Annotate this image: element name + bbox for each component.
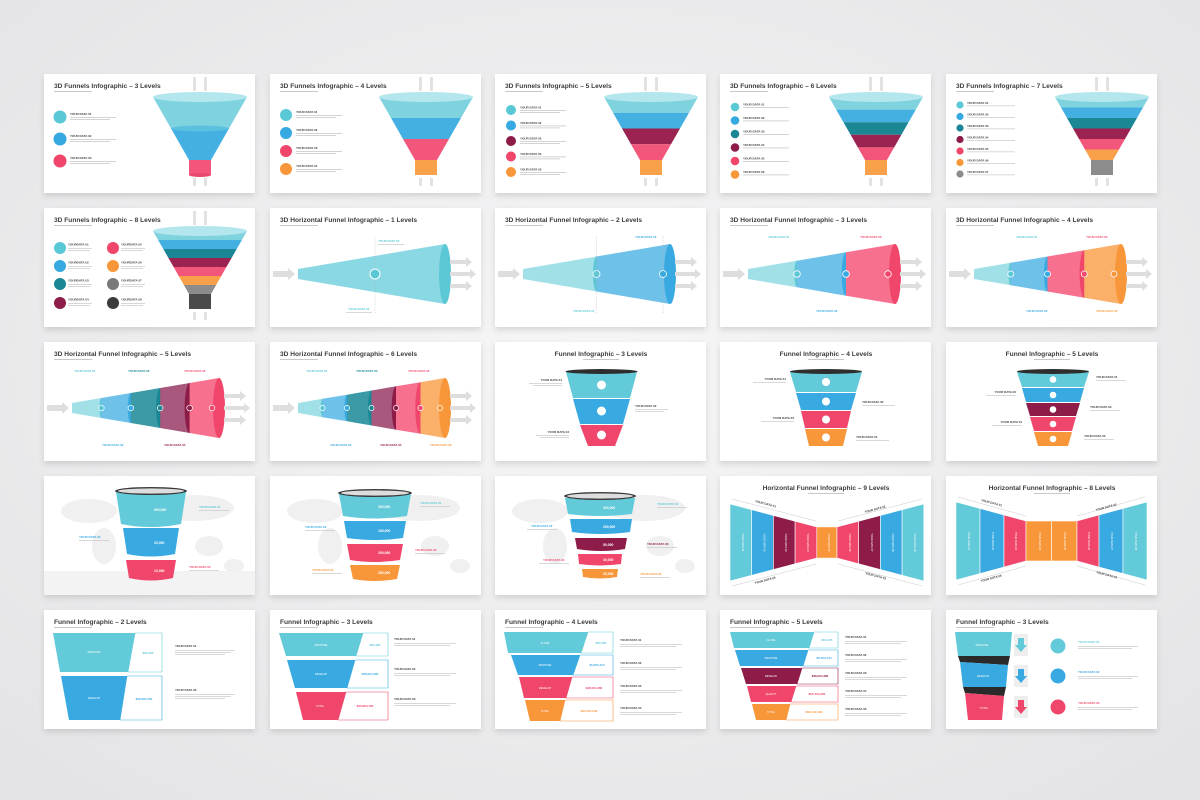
labels: YOUR DATA 03 — [860, 235, 882, 239]
labels: YOUR DATA 03 — [415, 548, 437, 552]
funnel — [564, 492, 636, 578]
labels: YOUR DATA 01 — [306, 369, 328, 373]
legend items — [956, 101, 1015, 178]
text: YOUR DATA 03 — [620, 684, 642, 688]
labels — [305, 501, 450, 574]
labels — [306, 369, 452, 447]
legend items: YOUR DATA 02 — [967, 112, 989, 116]
funnel: $50,485 — [370, 643, 381, 647]
card: horizontal funnel 5 levels — [44, 342, 255, 461]
labels: YOUR DATA 04 — [380, 443, 402, 447]
labels: YOUR DATA 03 — [1090, 405, 1112, 409]
card: 3D funnel 8 levels — [44, 208, 255, 327]
funnel: 10,000 — [154, 569, 164, 573]
text: YOUR DATA 02 — [175, 688, 197, 692]
labels: YOUR DATA 01 — [765, 377, 786, 381]
legend items: YOURDATA 02 — [68, 260, 89, 264]
funnel: $38,004,380 — [812, 674, 829, 678]
labels — [1016, 235, 1118, 313]
title: Funnel Infographic – 2 Levels — [54, 619, 147, 626]
labels: YOUR DATA 04 — [164, 443, 186, 447]
card: funnel 2 levels with values — [44, 610, 255, 729]
funnel — [153, 77, 247, 186]
funnel — [955, 632, 1012, 720]
funnel: CLOSE — [767, 638, 776, 642]
title: 3D Horizontal Funnel Infographic – 2 Levels — [505, 217, 642, 224]
card: horizontal funnel 1 level — [270, 208, 481, 327]
labels: YOUR DATA 05 — [184, 369, 206, 373]
labels: YOUR DATA 02 — [862, 400, 884, 404]
legend items: YOUR DATA 05 — [967, 147, 989, 151]
funnel — [604, 77, 698, 186]
bar labels: YOUR DATA 06 — [1087, 532, 1091, 551]
funnel: 300,000 — [378, 505, 390, 509]
side labels: YOUR DATA 03 — [865, 571, 887, 581]
legend items: YOUR DATA 03 — [296, 146, 318, 150]
side labels: YOUR DATA 02 — [1095, 502, 1117, 512]
funnel — [273, 238, 476, 314]
labels: YOUR DATA 02 — [635, 235, 657, 239]
legend items: YOUR DATA 02 — [70, 134, 92, 138]
bar labels: YOUR DATA 05 — [827, 533, 831, 552]
text: YOUR DATA 02 — [620, 661, 642, 665]
labels: YOUR DATA 04 — [856, 435, 878, 439]
legend items — [280, 109, 342, 175]
funnel: TOTAL — [980, 706, 989, 710]
side labels: YOUR DATA 01 — [981, 498, 1003, 508]
labels: YOUR DATA 04 — [1001, 420, 1022, 424]
funnel: $30,864,790 — [357, 704, 374, 708]
legend items: YOURDATA 07 — [121, 278, 142, 282]
funnel: 200,000 — [378, 551, 390, 555]
labels: YOUR DATA 01 — [1016, 235, 1038, 239]
funnel: 300,000 — [603, 506, 615, 510]
card: funnel 3 levels — [495, 342, 706, 461]
funnel: DEVELOP — [315, 672, 327, 676]
funnel — [723, 244, 926, 304]
card: stacked funnel 3 levels with map — [44, 476, 255, 595]
title: Funnel Infographic – 3 Levels — [280, 619, 373, 626]
funnel: 300,000 — [154, 508, 166, 512]
labels: YOUR DATA 01 — [768, 235, 790, 239]
labels: YOUR DATA 02 — [531, 524, 553, 528]
labels: YOUR DATA 02 — [816, 309, 838, 313]
text — [175, 644, 235, 699]
card: 3D funnel 7 levels — [946, 74, 1157, 193]
text: YOUR DATA 01 — [620, 638, 642, 642]
labels — [986, 375, 1126, 440]
title: 3D Funnels Infographic – 6 Levels — [730, 83, 837, 90]
bar labels — [741, 533, 917, 552]
title: Funnel Infographic – 3 Levels — [555, 351, 648, 358]
legend items: YOUR DATA 05 — [743, 156, 765, 160]
labels: YOUR DATA 02 — [102, 443, 124, 447]
bar labels: YOUR DATA 06 — [848, 533, 852, 552]
labels — [768, 235, 882, 313]
title: Funnel Infographic – 5 Levels — [1006, 351, 1099, 358]
funnel: QUALITY — [765, 692, 777, 696]
title: 3D Funnels Infographic – 3 Levels — [54, 83, 161, 90]
funnel: PROPOSE — [976, 643, 989, 647]
funnel: $59,284,790 — [136, 697, 153, 701]
legend items: YOURDATA 06 — [121, 260, 142, 264]
legend items: YOURDATA 03 — [68, 278, 89, 282]
side labels: YOUR DATA 02 — [864, 504, 886, 514]
labels: YOUR DATA 04 — [312, 568, 334, 572]
side labels: YOUR DATA 04 — [754, 575, 776, 585]
labels — [79, 505, 229, 571]
labels: YOUR DATA 02 — [330, 443, 352, 447]
bar labels: YOUR DATA 08 — [1134, 532, 1138, 551]
text: YOUR DATA 03 — [845, 671, 867, 675]
funnel — [379, 77, 473, 186]
funnel — [115, 487, 187, 580]
legend items — [54, 110, 116, 168]
arrows — [1014, 634, 1028, 718]
legend items: YOUR DATA 01 — [967, 101, 989, 105]
title: 3D Funnels Infographic – 7 Levels — [956, 83, 1063, 90]
labels: YOUR DATA 05 — [408, 369, 430, 373]
labels: YOUR DATA 03 — [128, 369, 150, 373]
title: Funnel Infographic – 4 Levels — [505, 619, 598, 626]
funnel — [949, 244, 1152, 304]
legend items: YOUR DATA 03 — [70, 156, 92, 160]
labels: YOUR DATA 01 — [657, 502, 679, 506]
text: YOUR DATA 01 — [1078, 640, 1100, 644]
title: Funnel Infographic – 4 Levels — [780, 351, 873, 358]
funnel — [53, 633, 162, 720]
title: Funnel Infographic – 5 Levels — [730, 619, 823, 626]
labels — [74, 369, 206, 447]
side labels: YOUR DATA 01 — [755, 499, 777, 509]
card: 3D funnel 3 levels — [44, 74, 255, 193]
legend items: YOUR DATA 06 — [967, 158, 989, 162]
funnel: DEVELOP — [539, 686, 551, 690]
funnel: DEVELOP — [765, 674, 777, 678]
side labels: YOUR DATA 04 — [980, 573, 1002, 583]
title: 3D Horizontal Funnel Infographic – 1 Levels — [280, 217, 417, 224]
side labels — [732, 499, 922, 586]
funnel: $50,485 — [143, 651, 154, 655]
funnel — [279, 633, 388, 720]
funnel: TOTAL — [767, 710, 776, 714]
bar labels: YOUR DATA 07 — [870, 533, 874, 552]
legend items: YOUR DATA 04 — [743, 143, 765, 147]
funnel — [790, 369, 862, 446]
text: YOUR DATA 01 — [394, 637, 416, 641]
side labels — [958, 497, 1145, 585]
funnel: $5,350,444 — [816, 656, 832, 660]
legend items: YOUR DATA 04 — [967, 136, 989, 140]
card: horizontal funnel 6 levels — [270, 342, 481, 461]
legend items: YOUR DATA 01 — [70, 112, 92, 116]
funnel: 250,000 — [378, 571, 390, 575]
funnel: 50,000 — [603, 543, 613, 547]
legend items — [54, 242, 145, 309]
funnel: 200,000 — [603, 525, 615, 529]
funnel — [566, 369, 638, 446]
text: YOUR DATA 02 — [845, 653, 867, 657]
labels: YOUR DATA 04 — [1096, 309, 1118, 313]
funnel: $5,350,444 — [589, 663, 605, 667]
legend items — [731, 102, 789, 179]
legend items: YOUR DATA 01 — [296, 110, 318, 114]
bar labels: YOUR DATA 09 — [913, 533, 917, 552]
title: 3D Funnels Infographic – 5 Levels — [505, 83, 612, 90]
bar labels: YOUR DATA 04 — [1038, 532, 1042, 551]
labels — [529, 378, 668, 438]
labels: YOUR DATA 05 — [640, 572, 662, 576]
text — [845, 635, 907, 716]
text: YOUR DATA 02 — [1078, 670, 1100, 674]
title: Horizontal Funnel Infographic – 9 Levels — [763, 485, 890, 492]
bar labels: YOUR DATA 01 — [741, 533, 745, 552]
card: funnel 4 levels with values — [495, 610, 706, 729]
labels: YOUR DATA 01 — [573, 309, 595, 313]
text: YOUR DATA 05 — [845, 707, 867, 711]
labels: YOUR DATA 01 — [199, 505, 221, 509]
bar labels: YOUR DATA 04 — [806, 533, 810, 552]
funnel — [338, 489, 412, 581]
title: 3D Horizontal Funnel Infographic – 4 Levels — [956, 217, 1093, 224]
card: stacked funnel 5 levels with map — [495, 476, 706, 595]
legend items: YOUR DATA 03 — [967, 124, 989, 128]
labels — [346, 239, 404, 313]
legend items: YOURDATA 05 — [121, 242, 142, 246]
legend items: YOUR DATA 02 — [743, 116, 765, 120]
legend items: YOUR DATA 05 — [520, 168, 542, 172]
funnel: PROPOSE — [539, 663, 552, 667]
text: YOUR DATA 01 — [845, 635, 867, 639]
title: Horizontal Funnel Infographic – 8 Levels — [989, 485, 1116, 492]
bar labels — [967, 532, 1138, 551]
world map background — [512, 495, 695, 573]
funnel: CLOSE — [541, 641, 550, 645]
legend items: YOURDATA 04 — [68, 298, 89, 302]
legend items: YOUR DATA 02 — [520, 121, 542, 125]
text: YOUR DATA 01 — [175, 644, 197, 648]
funnel: $50,485 — [596, 641, 607, 645]
labels: YOUR DATA 01 — [541, 378, 562, 382]
text: YOUR DATA 03 — [1078, 701, 1100, 705]
funnel: PROPOSE — [315, 643, 328, 647]
title: 3D Funnels Infographic – 4 Levels — [280, 83, 387, 90]
title: Funnel Infographic – 3 Levels — [956, 619, 1049, 626]
legend items: YOUR DATA 04 — [520, 152, 542, 156]
labels: YOUR DATA 02 — [305, 525, 327, 529]
funnel — [273, 378, 476, 438]
card: stacked funnel 4 levels with map — [270, 476, 481, 595]
funnel — [1055, 77, 1149, 186]
labels — [527, 502, 687, 578]
bar labels: YOUR DATA 01 — [967, 532, 971, 551]
labels: YOUR DATA 03 — [548, 430, 569, 434]
card: horizontal funnel 8 levels — [946, 476, 1157, 595]
bow tie bars — [956, 502, 1147, 580]
labels — [753, 377, 895, 441]
labels — [573, 235, 663, 313]
legend items: YOUR DATA 01 — [520, 106, 542, 110]
funnel: TOTAL — [316, 704, 325, 708]
labels: YOUR DATA 03 — [189, 565, 211, 569]
labels: YOUR DATA 02 — [378, 239, 400, 243]
text: YOUR DATA 04 — [620, 706, 642, 710]
funnel: 30,000 — [603, 572, 613, 576]
icons — [1050, 638, 1066, 714]
legend items: YOUR DATA 03 — [743, 130, 765, 134]
card: 3D funnel 4 levels — [270, 74, 481, 193]
card: funnel 3 levels with values — [270, 610, 481, 729]
labels: YOUR DATA 04 — [543, 558, 565, 562]
funnel: DEVELOP — [88, 696, 100, 700]
labels: YOUR DATA 03 — [1086, 235, 1108, 239]
labels: YOUR DATA 01 — [348, 307, 370, 311]
title: 3D Horizontal Funnel Infographic – 6 Levels — [280, 351, 417, 358]
text — [394, 637, 456, 706]
legend items — [506, 105, 566, 177]
labels: YOUR DATA 02 — [79, 535, 101, 539]
card: horizontal funnel 3 levels — [720, 208, 931, 327]
bar labels: YOUR DATA 03 — [784, 533, 788, 552]
bar labels: YOUR DATA 02 — [991, 532, 995, 551]
funnel: $52,704,284 — [809, 692, 826, 696]
card: funnel 5 levels with values — [720, 610, 931, 729]
title: 3D Horizontal Funnel Infographic – 3 Levels — [730, 217, 867, 224]
text: YOUR DATA 03 — [394, 697, 416, 701]
bar labels: YOUR DATA 03 — [1014, 532, 1018, 551]
card: funnel 3 levels with arrows and icons — [946, 610, 1157, 729]
legend items: YOURDATA 08 — [121, 298, 142, 302]
funnel — [47, 378, 250, 438]
labels: YOUR DATA 01 — [74, 369, 96, 373]
card: horizontal funnel 4 levels — [946, 208, 1157, 327]
funnel — [829, 77, 923, 186]
card: 3D funnel 6 levels — [720, 74, 931, 193]
funnel: TOTAL — [541, 709, 550, 713]
funnel: PROPOSE — [765, 656, 778, 660]
world map background — [287, 495, 470, 573]
funnel: 40,000 — [603, 558, 613, 562]
world map background — [61, 495, 244, 573]
funnel: $38,004,380 — [586, 686, 603, 690]
card: funnel 5 levels — [946, 342, 1157, 461]
labels: YOUR DATA 03 — [356, 369, 378, 373]
bar labels: YOUR DATA 02 — [762, 533, 766, 552]
funnel: $58,142,433 — [806, 710, 823, 714]
bow tie bars — [730, 504, 924, 581]
labels: YOUR DATA 06 — [430, 443, 452, 447]
title: 3D Horizontal Funnel Infographic – 5 Levels — [54, 351, 191, 358]
text: YOUR DATA 04 — [845, 689, 867, 693]
labels: YOUR DATA 03 — [647, 542, 669, 546]
labels: YOUR DATA 02 — [1026, 309, 1048, 313]
bar labels: YOUR DATA 08 — [891, 533, 895, 552]
card: horizontal funnel 2 levels — [495, 208, 706, 327]
text — [620, 638, 682, 715]
funnel: PROPOSE — [88, 650, 101, 654]
labels: YOUR DATA 02 — [995, 390, 1016, 394]
funnel — [730, 632, 838, 720]
card: 3D funnel 5 levels — [495, 74, 706, 193]
legend items: YOUR DATA 04 — [296, 164, 318, 168]
text — [1078, 640, 1138, 710]
funnel: 20,000 — [154, 541, 164, 545]
funnel: DEVELOP — [977, 674, 989, 678]
labels: YOUR DATA 03 — [773, 416, 794, 420]
funnel — [504, 632, 613, 721]
funnel — [153, 211, 247, 320]
labels: YOUR DATA 02 — [635, 404, 657, 408]
labels: YOUR DATA 05 — [1084, 434, 1106, 438]
bar labels: YOUR DATA 07 — [1110, 532, 1114, 551]
legend items: YOURDATA 01 — [68, 242, 89, 246]
legend items: YOUR DATA 01 — [743, 102, 765, 106]
funnel: $38,004,380 — [362, 672, 379, 676]
side labels: YOUR DATA 03 — [1096, 570, 1118, 580]
legend items: YOUR DATA 03 — [520, 136, 542, 140]
labels: YOUR DATA 01 — [1096, 375, 1118, 379]
card: funnel 4 levels — [720, 342, 931, 461]
legend items: YOUR DATA 07 — [967, 170, 989, 174]
bar labels: YOUR DATA 05 — [1063, 532, 1067, 551]
labels: YOUR DATA 01 — [420, 501, 442, 505]
text: YOUR DATA 02 — [394, 667, 416, 671]
funnel: $50,485 — [822, 638, 833, 642]
funnel: 150,000 — [378, 529, 390, 533]
legend items: YOUR DATA 06 — [743, 170, 765, 174]
title: 3D Funnels Infographic – 8 Levels — [54, 217, 161, 224]
legend items: YOUR DATA 02 — [296, 128, 318, 132]
funnel: $33,437,249 — [581, 709, 598, 713]
card: horizontal funnel 9 levels — [720, 476, 931, 595]
funnel — [1017, 369, 1089, 446]
funnel — [498, 244, 701, 304]
